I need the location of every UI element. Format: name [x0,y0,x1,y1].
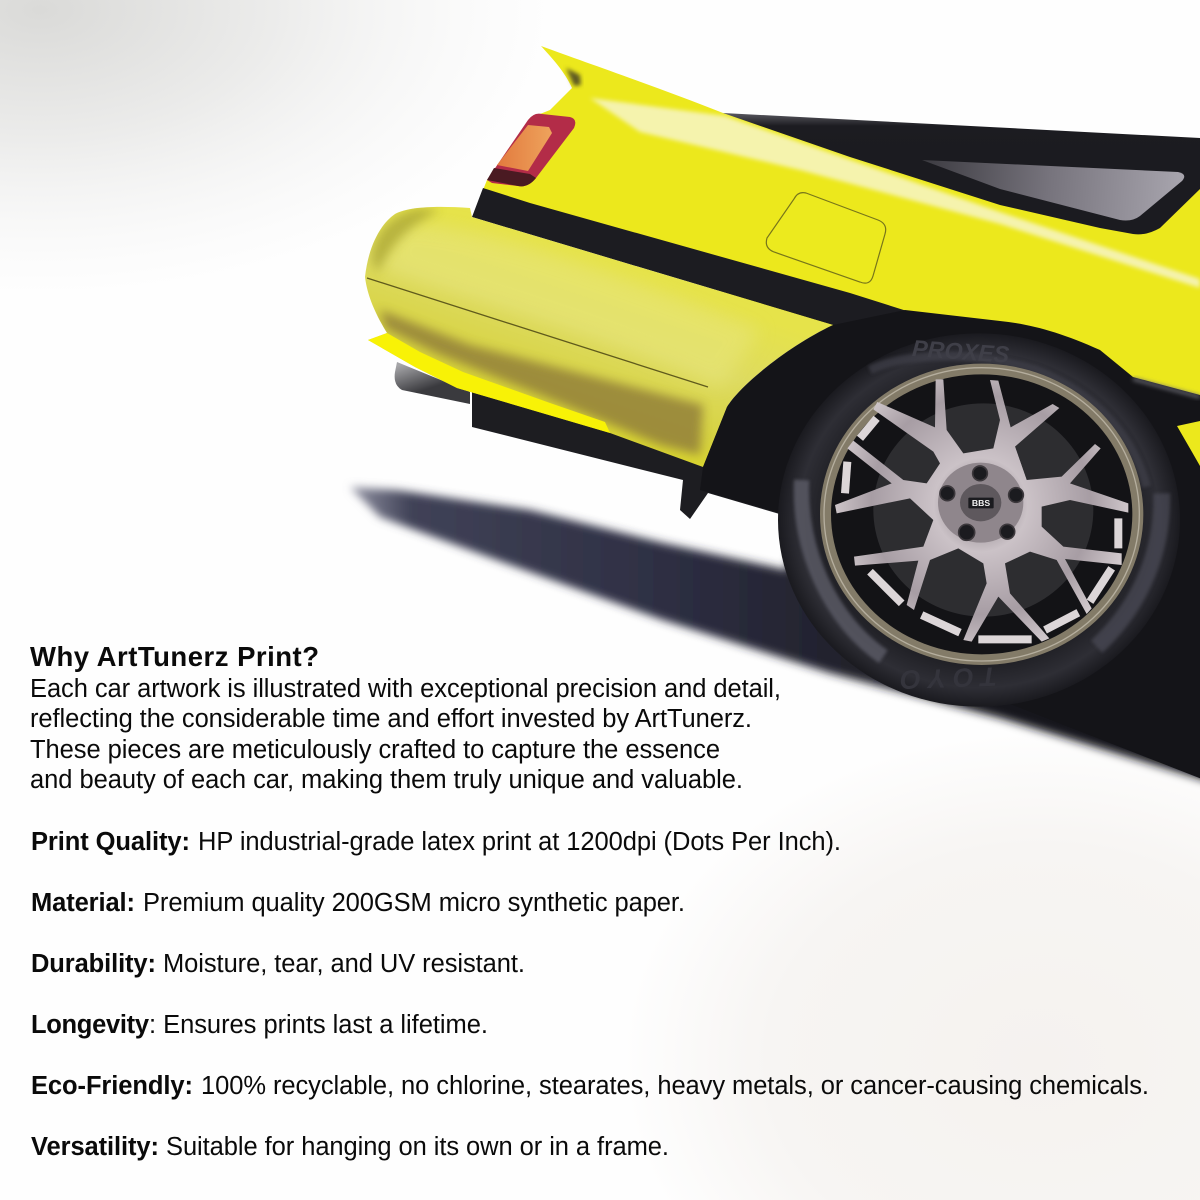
tail light [487,114,575,186]
ground shadow [350,487,1200,791]
tire [778,333,1180,707]
arch trim highlight [1133,379,1200,397]
spoiler underside shadow [566,68,581,86]
intro paragraph: and beauty of each car, making them truly unique and valuable. [30,766,743,794]
rim interior [831,374,1132,654]
spec: versatility: Versatility: [31,1133,159,1161]
bumper shadow band [380,310,703,455]
wheel arch and black sill [700,310,1200,790]
yellow wedge behind wheel [1177,421,1200,466]
spec: longevity: Longevity [31,1011,150,1039]
window opening [723,113,1200,234]
tire sheen [801,480,883,657]
car illustration [365,46,1200,790]
spec: longevity: : Ensures prints last a lifetime. [149,1011,488,1039]
intro paragraph: Each car artwork is illustrated with exceptional precision and detail, [30,675,781,703]
hub: BBS [972,498,990,508]
intro paragraph: These pieces are meticulously crafted to capture the essence [30,736,720,764]
Y spokes [835,379,1128,642]
spec: eco-friendly: Eco-Friendly: [31,1072,193,1100]
bumper corner shading [372,208,440,272]
rear bumper [365,207,833,467]
exhaust pipe [395,362,470,404]
tire text: TOYO: TOYO [900,661,998,695]
brake rotor [873,403,1093,617]
bumper crease line [367,278,708,387]
spec: print quality: Print Quality: [31,828,190,856]
bumper light reflection [385,225,760,390]
spec: material: Premium quality 200GSM micro synthetic paper. [143,889,685,917]
body highlight band [590,98,1200,288]
fuel flap [766,193,886,283]
bumper shading group [372,208,760,455]
tire text: PROXES: PROXES [911,335,1011,368]
black side stripe [472,188,910,340]
spec: durability: Durability: [31,950,156,978]
black under-panel and mudflap [472,385,800,520]
spec: eco-friendly: 100% recyclable, no chlorine, stearates, heavy metals, or cancer-causing chemicals. [201,1072,1149,1100]
heading: Why ArtTunerz Print? [30,641,319,672]
spec: material: Material: [31,889,135,917]
wheel [778,333,1180,707]
barrel light strips [845,418,1118,639]
lug nuts [940,466,1023,540]
intro paragraph [30,675,781,794]
upper yellow body with spoiler [483,46,1200,460]
center cap [968,498,994,508]
intro paragraph: reflecting the considerable time and effort invested by ArtTunerz. [30,705,752,733]
side glass [922,160,1184,220]
spec: durability: Moisture, tear, and UV resistant. [163,950,525,978]
spec: versatility: Suitable for hanging on its own or in a frame. [166,1133,669,1161]
bright yellow lip [368,333,610,433]
spoke center web [927,447,1042,563]
rim outer band [820,364,1143,665]
hub [938,463,1023,543]
spec: print quality: HP industrial-grade latex print at 1200dpi (Dots Per Inch). [198,828,841,856]
